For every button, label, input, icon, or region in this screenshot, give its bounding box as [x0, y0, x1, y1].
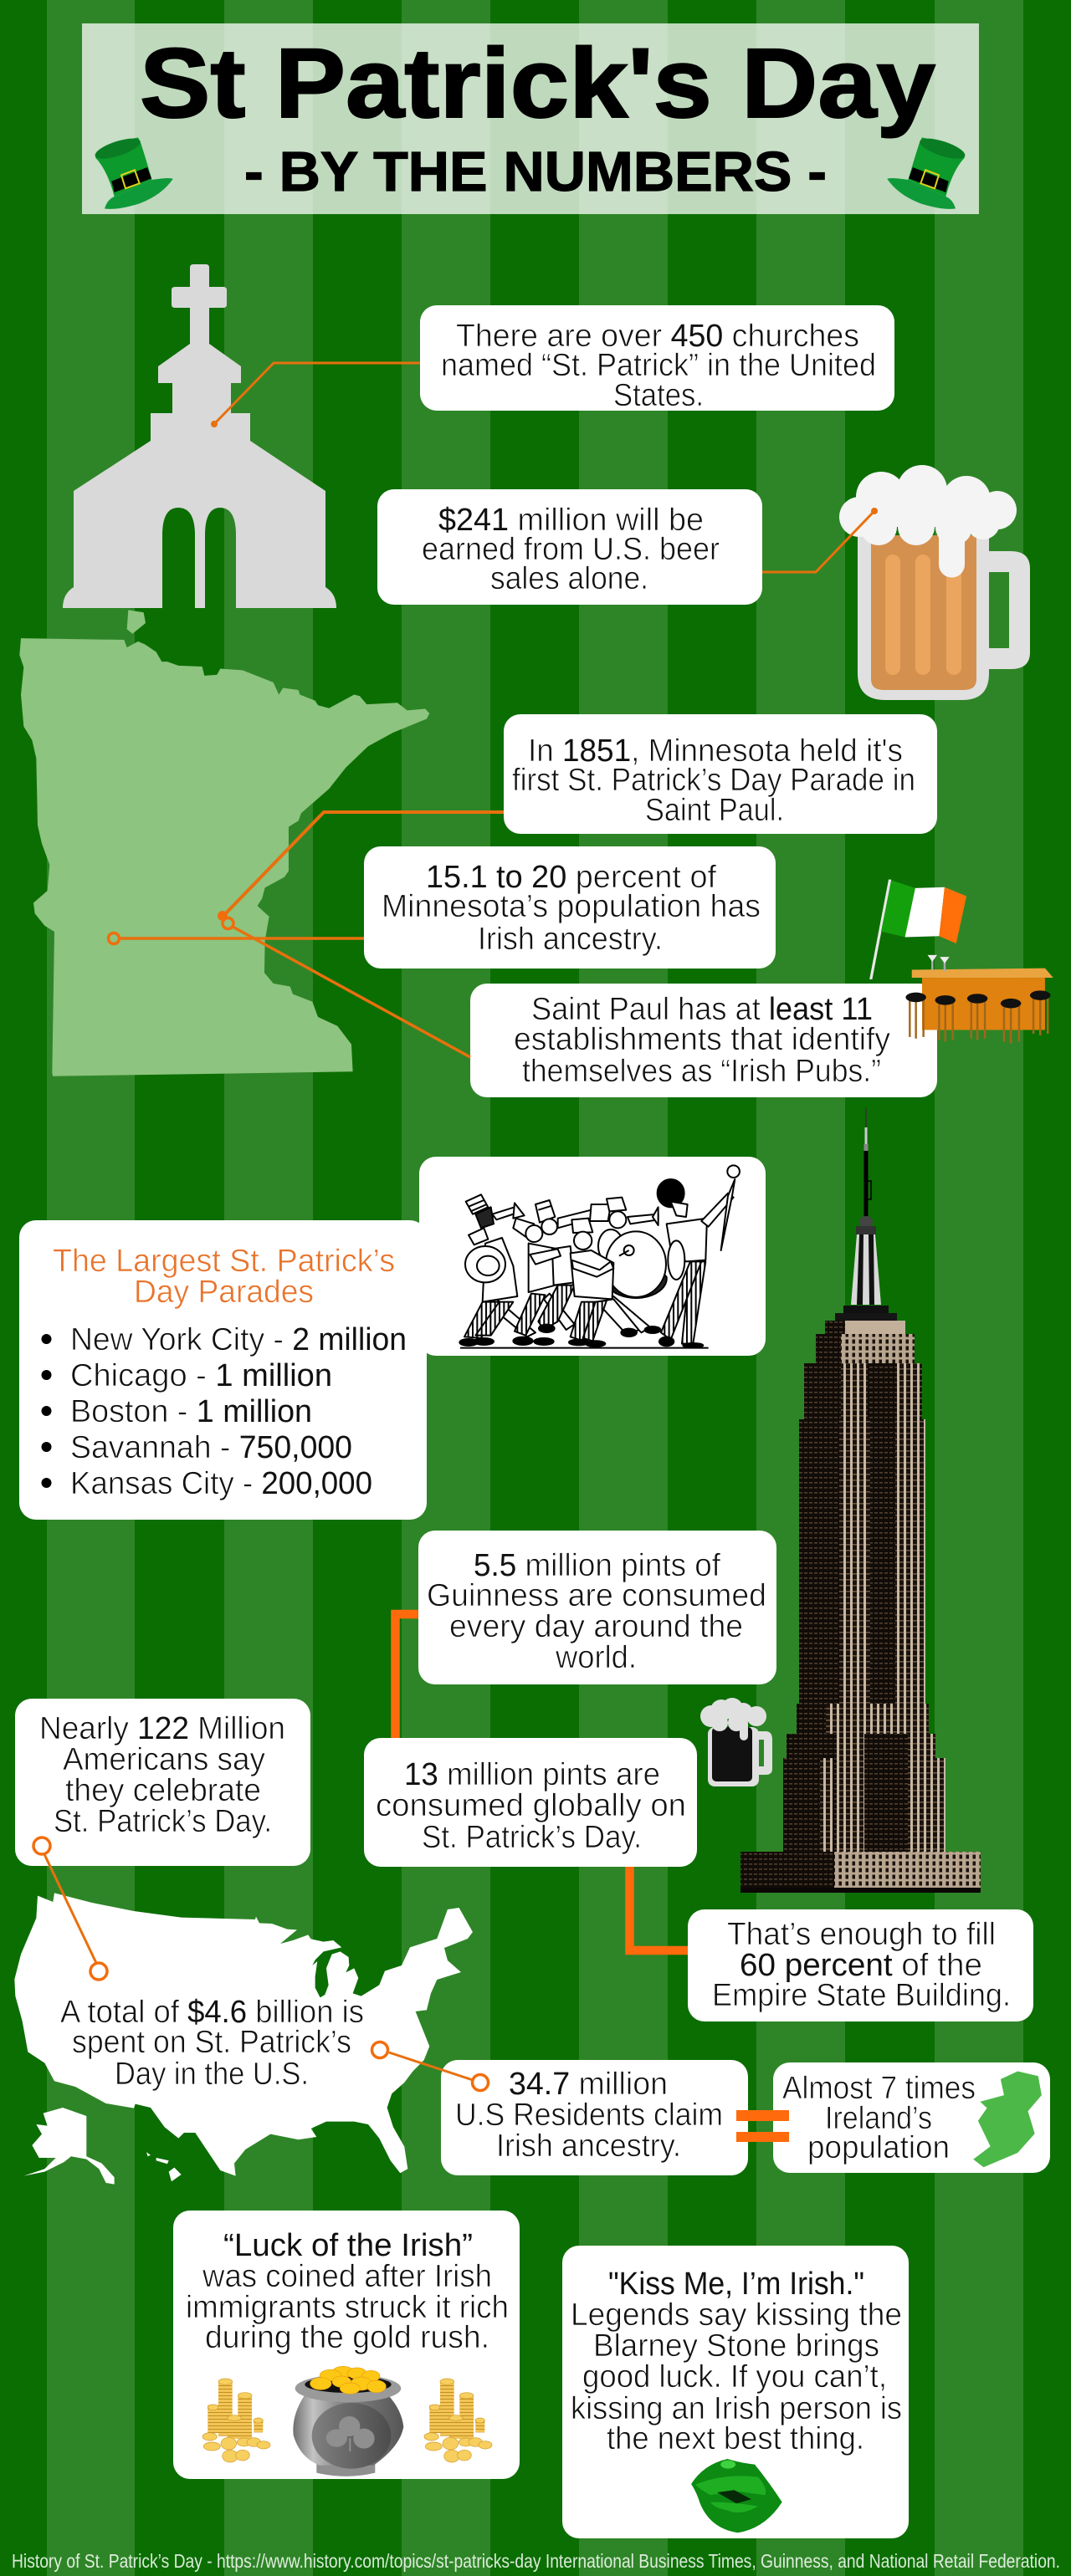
connector: Guinness to 13 million [395, 1614, 418, 1740]
text: total spent: spent on St. Patrick’s [72, 2025, 351, 2060]
text: 1851 parade: first St. Patrick’s Day Parade in [512, 763, 915, 798]
text: 1851 parade: Saint Paul. [645, 793, 784, 828]
icon: right leprechaun hat [887, 135, 967, 209]
subtitle: - BY THE NUMBERS - [244, 141, 827, 203]
text: Irish ancestry percent: 15.1 to 20 percent of [426, 860, 716, 895]
picture: marching band [419, 1157, 766, 1356]
callout: times Ireland population [773, 2062, 1050, 2173]
text: kiss me: Blarney Stone brings [593, 2328, 879, 2364]
list: parades: Savannah - 750,000 [70, 1430, 352, 1465]
icon: green lips [691, 2459, 782, 2533]
connector: church [211, 363, 420, 427]
text: Guinness pints: 5.5 million pints of [474, 1548, 720, 1583]
text: 122 million: they celebrate [65, 1773, 261, 1808]
callout: Guinness pints [418, 1531, 776, 1684]
text: 60 percent: That’s enough to fill [727, 1917, 996, 1952]
text: 13 million pints: consumed globally on [376, 1788, 686, 1823]
text: beer sales: sales alone. [490, 561, 648, 596]
title banner [82, 23, 979, 214]
text: 13 million pints: St. Patrick’s Day. [422, 1820, 642, 1855]
text: Guinness pints: Guinness are consumed [427, 1578, 766, 1613]
text: kiss me [571, 2267, 902, 2456]
callout: 13 million pints [364, 1738, 697, 1867]
list: parades: Boston - 1 million [70, 1394, 312, 1429]
list: parades: New York City - 2 million [70, 1322, 407, 1357]
text: 122 million [39, 1711, 285, 1839]
text: luck of the Irish: “Luck of the Irish” [223, 2228, 473, 2263]
text: Irish pubs: Saint Paul has at least 11 [531, 992, 873, 1027]
text: Irish pubs: establishments that identify [514, 1022, 890, 1057]
text: beer sales [422, 503, 720, 596]
callout: Irish pubs [470, 984, 937, 1097]
text: Guinness pints: world. [555, 1640, 637, 1675]
list: parades: Kansas City - 200,000 [70, 1466, 372, 1501]
heading: largest parades: The Largest St. Patrick’s [53, 1244, 395, 1279]
icon: left leprechaun hat [93, 135, 173, 209]
illustration: marching band [459, 1165, 740, 1348]
text: luck of the Irish: immigrants struck it rich [186, 2290, 509, 2325]
text: 1851 parade: In 1851, Minnesota held it's [528, 733, 903, 769]
panel: kiss me [562, 2246, 909, 2538]
list: parades [42, 1322, 407, 1501]
text: Irish ancestry percent [382, 860, 761, 957]
connector: beer [762, 508, 878, 572]
icon: church [63, 264, 336, 608]
text: 13 million pints: 13 million pints are [404, 1757, 660, 1792]
panel: largest parades [19, 1220, 427, 1520]
connectors: Minnesota [109, 812, 504, 1057]
icon: Ireland [973, 2071, 1042, 2167]
heading: largest parades [53, 1244, 395, 1310]
text: churches [441, 319, 876, 413]
text: churches: named “St. Patrick” in the United [441, 348, 876, 383]
icon: Irish flag and pub bar [871, 880, 1053, 1044]
text: kiss me: good luck. If you can’t, [582, 2359, 887, 2395]
title: St Patrick's Day [140, 28, 935, 139]
text: 34.7 million: Irish ancestry. [496, 2129, 681, 2164]
callout: 60 percent [688, 1909, 1033, 2021]
text: kiss me: "Kiss Me, I’m Irish." [608, 2267, 864, 2302]
icon: right gold coin stack [424, 2379, 492, 2462]
connector: map to 34.7 million [372, 2042, 489, 2091]
icon: dark beer mug [700, 1698, 772, 1786]
text: 60 percent: Empire State Building. [712, 1978, 1011, 2013]
text: kiss me: Legends say kissing the [571, 2297, 902, 2333]
text: 13 million pints [376, 1757, 686, 1855]
callout: 122 million [15, 1699, 310, 1866]
text: 122 million: St. Patrick’s Day. [54, 1804, 272, 1839]
connector: 122 million to map [33, 1837, 107, 1980]
text: total spent: A total of $4.6 billion is [60, 1995, 364, 2030]
text: beer sales: $241 million will be [438, 503, 704, 538]
icon: pot of gold [293, 2366, 403, 2476]
map: United States [14, 1893, 473, 2185]
callout: Irish ancestry percent [364, 846, 776, 969]
callout: beer sales [377, 489, 878, 605]
heading: largest parades: Day Parades [134, 1275, 314, 1310]
text: total spent [60, 1995, 364, 2092]
text: Guinness pints [427, 1548, 766, 1675]
list: parades: Chicago - 1 million [70, 1358, 332, 1393]
icon: Empire State Building [740, 1107, 981, 1893]
connector: 13 million to Empire State [629, 1867, 688, 1950]
callout: 34.7 million [441, 2060, 748, 2175]
text: 122 million: Americans say [63, 1742, 265, 1777]
icon: left gold coin stack [202, 2379, 270, 2462]
callout: 1851 parade [504, 714, 937, 834]
text: total spent: Day in the U.S. [115, 2057, 309, 2092]
text: luck of the Irish: during the gold rush. [205, 2320, 489, 2355]
icon: beer mug [839, 465, 1030, 700]
text: 60 percent [712, 1917, 1011, 2013]
map: Minnesota [19, 610, 429, 1076]
text: 34.7 million: U.S Residents claim [455, 2098, 723, 2133]
text: luck of the Irish: was coined after Irish [202, 2259, 492, 2294]
text: times Ireland population: Almost 7 times [782, 2071, 976, 2106]
text: churches: States. [613, 378, 704, 413]
callout: churches [211, 305, 894, 427]
text: 60 percent: 60 percent of the [740, 1948, 982, 1983]
text: kiss me: kissing an Irish person is [571, 2391, 902, 2426]
text: luck of the Irish [186, 2228, 509, 2355]
text: 34.7 million: 34.7 million [509, 2067, 668, 2102]
text: Irish ancestry percent: Irish ancestry. [478, 922, 663, 957]
text: Irish pubs: themselves as “Irish Pubs.” [522, 1054, 881, 1089]
text: 122 million: Nearly 122 Million [39, 1711, 285, 1746]
text: 34.7 million [455, 2067, 723, 2164]
text: Irish pubs [514, 992, 890, 1089]
icon: equals sign [736, 2110, 789, 2142]
text: Guinness pints: every day around the [449, 1609, 743, 1644]
text: times Ireland population: population [807, 2130, 950, 2165]
text: beer sales: earned from U.S. beer [422, 532, 720, 567]
text: times Ireland population: Ireland’s [825, 2101, 932, 2136]
text: kiss me: the next best thing. [607, 2421, 864, 2456]
text: Irish ancestry percent: Minnesota’s population has [382, 889, 761, 924]
text: 1851 parade [512, 733, 915, 828]
text: times Ireland population [782, 2071, 976, 2165]
text: churches: There are over 450 churches [456, 319, 859, 354]
panel: luck of the Irish [173, 2211, 520, 2479]
